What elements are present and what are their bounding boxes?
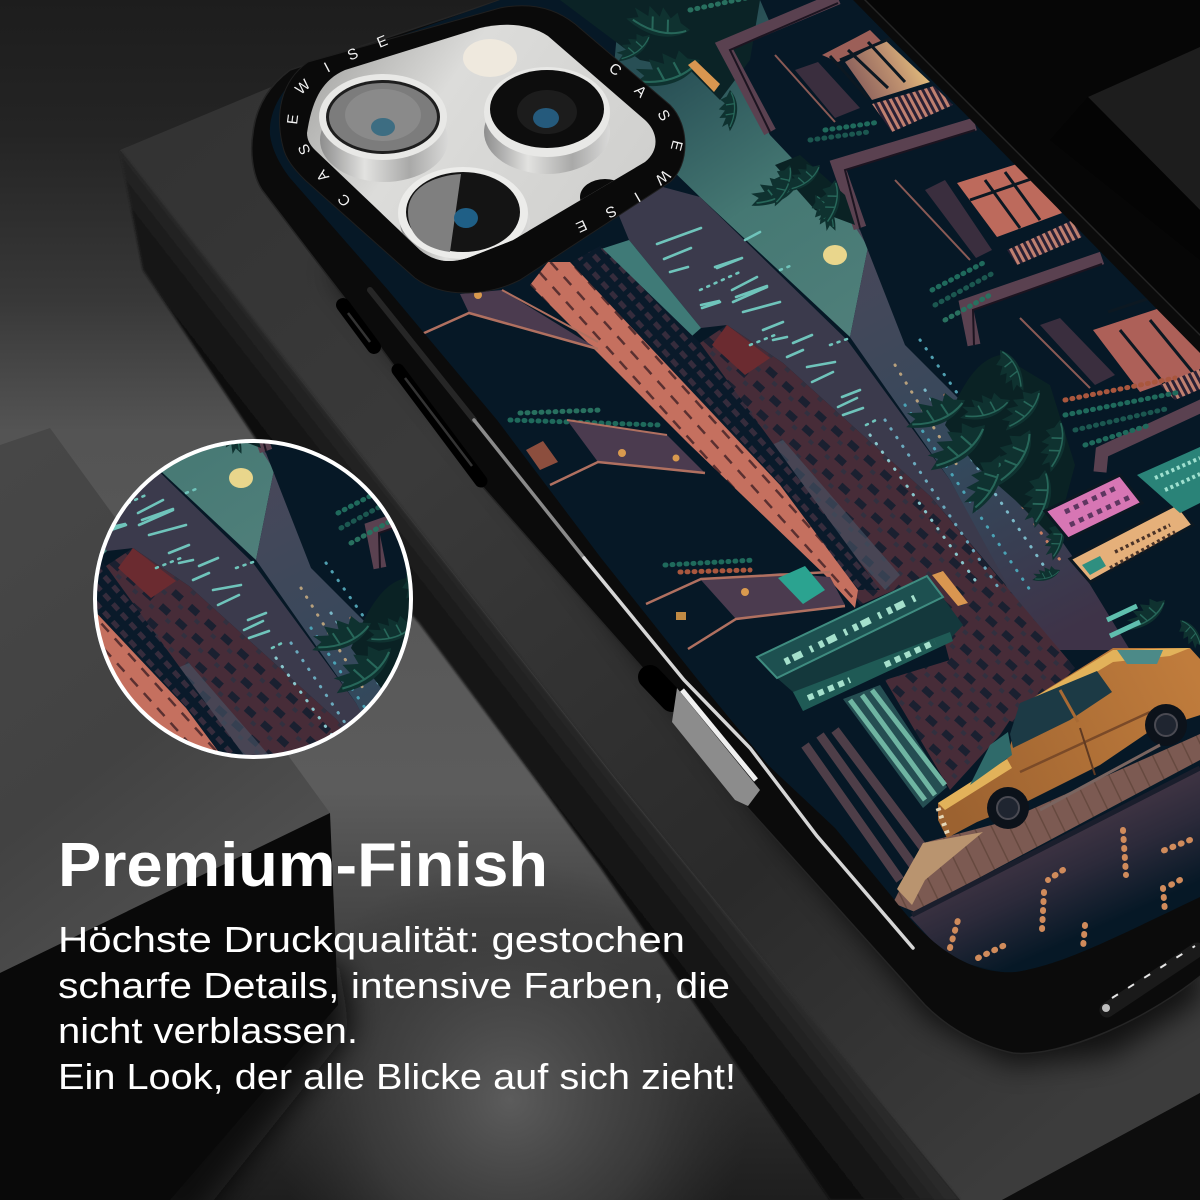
brand text right: CASEWISE (576, 64, 683, 233)
lens 1 (319, 74, 448, 182)
silver action button (672, 688, 760, 806)
microphone (580, 179, 614, 200)
body text: nicht verblassen. (58, 1010, 358, 1051)
phone side buttons (343, 305, 672, 700)
body text: scharfe Details, intensive Farben, die (58, 965, 730, 1006)
phone screen artwork (250, 0, 1200, 990)
charging port (1102, 946, 1197, 1012)
body text (58, 919, 736, 1097)
body text: Ein Look, der alle Blicke auf sich zieht! (58, 1056, 736, 1097)
zoom circle: detail of artwork (93, 439, 413, 759)
camera island (279, 5, 686, 294)
phone case body (252, 0, 1200, 1053)
flash (463, 39, 517, 77)
lens 3 (398, 167, 530, 264)
side highlight strip (370, 290, 913, 948)
camera glass (307, 25, 656, 261)
title: Premium-Finish (58, 831, 548, 900)
brand text left: CASEWISE (286, 35, 388, 206)
body text: Höchste Druckqualität: gestochen (58, 919, 685, 960)
lens 2 (484, 67, 610, 174)
